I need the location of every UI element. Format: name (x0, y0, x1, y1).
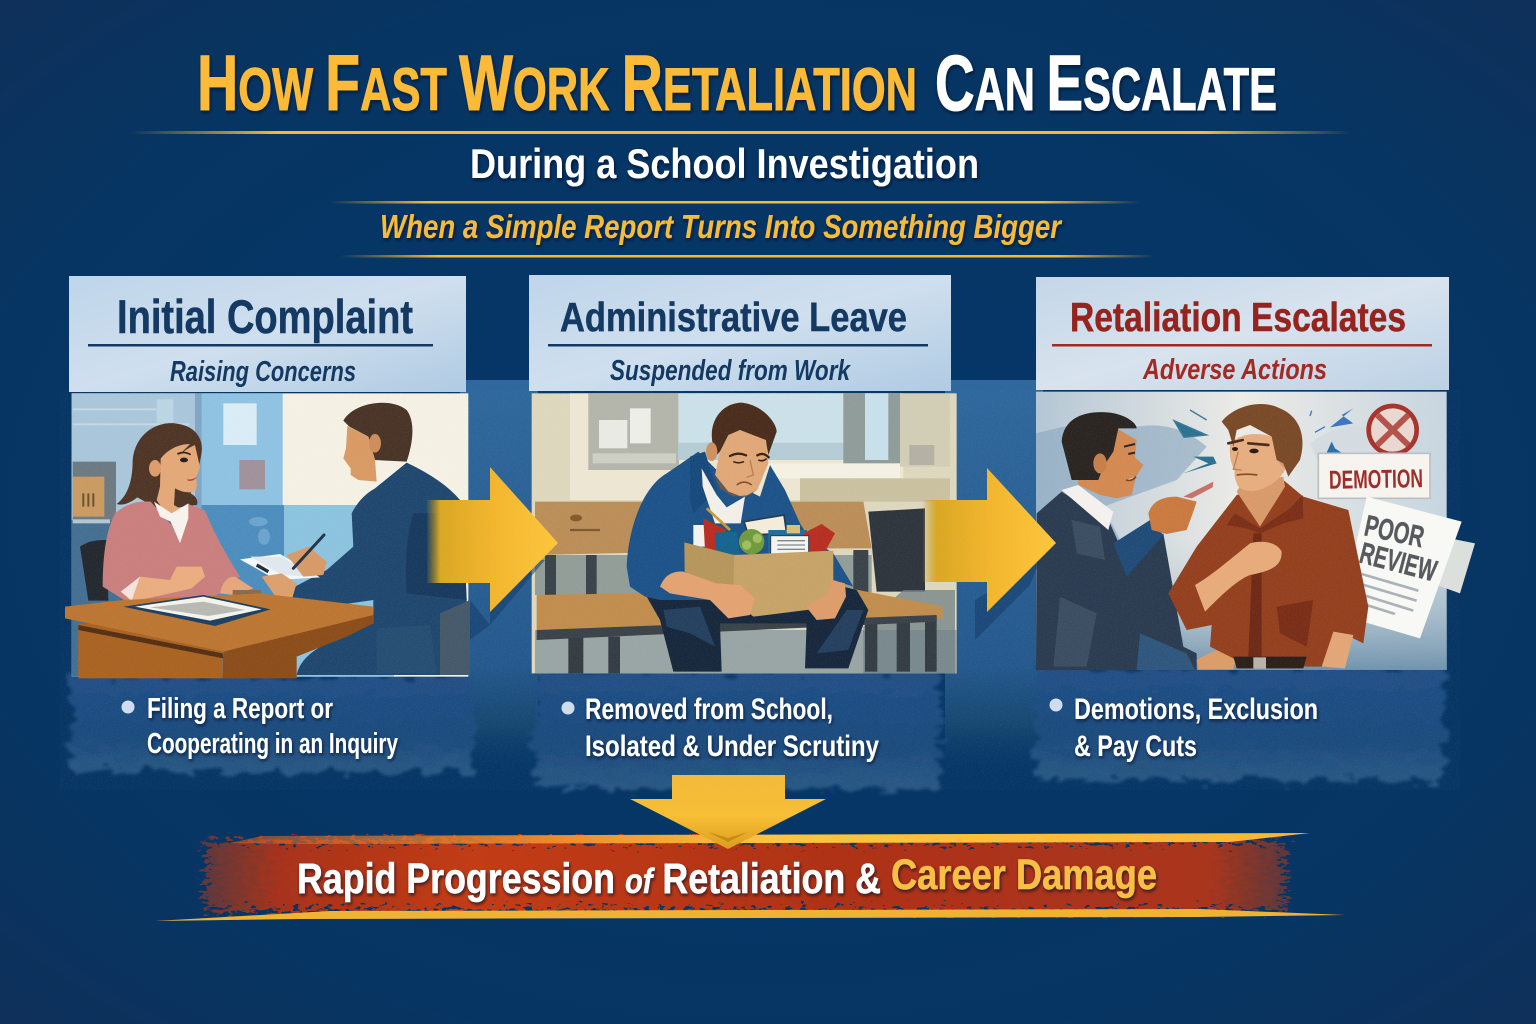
panel two header (529, 275, 951, 391)
panel three bullet text: Demotions, Exclusion (1074, 693, 1318, 726)
panel three bullet text (1074, 693, 1318, 763)
panel two heading rule (548, 344, 928, 346)
blue texture band between panels one and two (460, 380, 538, 775)
title (197, 38, 1277, 127)
banner text: Rapid Progression of Retaliation & (297, 855, 881, 903)
panel one header (69, 276, 466, 392)
panel three heading rule (1052, 344, 1432, 346)
arrow: complaint to leave (427, 467, 558, 640)
footer band: panel one (72, 676, 472, 772)
texture grain (60, 390, 1460, 790)
documents behind the man (1340, 497, 1475, 638)
panel one bullet text: Filing a Report or (147, 693, 333, 725)
banner text: Career Damage (891, 851, 1157, 899)
panel one bullet text: Cooperating in an Inquiry (147, 728, 398, 760)
panel two bullet text (585, 693, 879, 763)
panel three bullet text: & Pay Cuts (1074, 730, 1197, 763)
banner body (205, 841, 1285, 911)
man right (1168, 404, 1368, 669)
footer band: panel three (1036, 668, 1444, 780)
banner bottom line (155, 909, 1345, 921)
tagline: When a Simple Report Turns Into Something Bigger (380, 208, 1063, 245)
arrow: leave to retaliation (923, 468, 1056, 640)
footer band: panel two (535, 670, 940, 788)
banner text (297, 851, 1157, 903)
panel one heading: Initial Complaint (117, 290, 413, 343)
arrow: down to banner (630, 775, 826, 849)
panel one bullet dot (122, 700, 134, 714)
poor review text (1356, 510, 1440, 588)
title rule (130, 131, 1350, 134)
poor review text: REVIEW (1356, 537, 1440, 588)
panel three subheading: Adverse Actions (1142, 354, 1327, 386)
blue texture band between panels two and three (945, 380, 1043, 775)
banner: rapid progression (155, 833, 1345, 921)
title white part: CAN ESCALATE (935, 38, 1277, 127)
panel one heading rule (88, 344, 433, 346)
panel one illustration (65, 393, 470, 678)
man left (1036, 412, 1247, 670)
tagline rule bottom (340, 255, 1155, 258)
panel two bullet dot (562, 702, 574, 714)
panel: retaliation escalates (1036, 277, 1475, 763)
subtitle: During a School Investigation (470, 140, 979, 187)
panel two bullet text: Removed from School, (585, 693, 833, 726)
panel three illustration (1036, 392, 1475, 670)
panel three bullet dot (1050, 698, 1062, 712)
poor review text: POOR (1362, 510, 1427, 554)
panel: initial complaint (65, 276, 470, 760)
panel two subheading: Suspended from Work (610, 355, 851, 387)
panel two heading: Administrative Leave (560, 294, 907, 340)
demotion sign text: DEMOTION (1329, 463, 1423, 495)
printer (73, 462, 116, 520)
panel one bullet text (147, 693, 398, 760)
panel two illustration (532, 393, 957, 673)
panel three header (1036, 277, 1449, 390)
tagline rule top (330, 201, 1140, 204)
title yellow part: HOW FAST WORK RETALIATION (197, 38, 917, 127)
no-entry sign (1369, 406, 1417, 454)
panel two bullet text: Isolated & Under Scrutiny (585, 730, 879, 763)
panel: administrative leave (529, 275, 957, 763)
panel three heading: Retaliation Escalates (1070, 294, 1406, 340)
panel one subheading: Raising Concerns (170, 356, 356, 388)
banner top line (230, 833, 1310, 844)
